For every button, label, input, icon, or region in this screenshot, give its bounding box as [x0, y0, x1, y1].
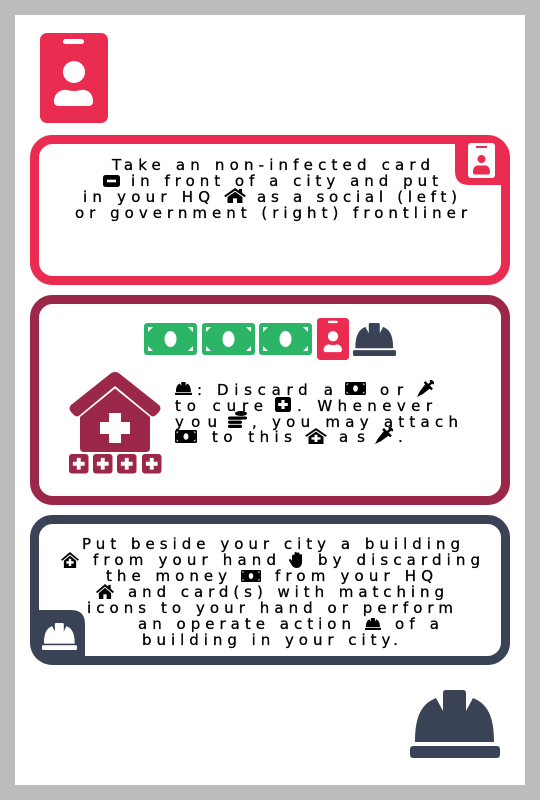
text: hospital rule — [175, 380, 458, 446]
text: hospital rule: as — [339, 428, 365, 446]
text: build rule: icons to your hand or perform — [87, 599, 453, 617]
icon: hospital — [69, 372, 162, 474]
text: hospital rule: to cure — [175, 397, 263, 415]
text: frontliner rule: in front of a city and put — [131, 172, 438, 190]
text: hospital rule: you — [175, 413, 217, 431]
text: build rule: from your hand — [93, 551, 276, 569]
text: build rule: an operate action — [138, 615, 351, 633]
text: hospital rule: Discard a — [217, 381, 333, 399]
corner tab with id icon — [455, 137, 508, 185]
panel: build action — [32, 520, 506, 663]
text: build rule: of a — [395, 615, 439, 633]
text: build rule: by discarding — [318, 551, 480, 569]
icon: frontliner id badge — [40, 33, 108, 123]
text: build rule: from your HQ — [275, 567, 433, 585]
text: build rule — [61, 535, 480, 649]
text: hospital rule: . Whenever — [297, 397, 433, 415]
text: frontliner rule: or government (right) frontliner — [75, 204, 468, 222]
text: frontliner rule: in your HQ — [83, 188, 210, 206]
text: build rule: Put beside your city a building — [82, 535, 460, 553]
panel: frontliner action — [34, 137, 508, 280]
text: hospital rule: , you may attach — [252, 413, 458, 431]
text: frontliner rule — [75, 156, 468, 222]
icon: large helmet — [410, 690, 500, 758]
text: build rule: and card(s) with matching — [128, 583, 444, 601]
cost: three money cards, id card, helmet — [144, 318, 396, 360]
corner tab with helmet icon — [32, 610, 85, 663]
text: hospital rule: : — [197, 381, 202, 399]
text: hospital rule: to this — [212, 428, 292, 446]
text: hospital rule: or — [380, 381, 404, 399]
text: frontliner rule: as a social (left) — [257, 188, 457, 206]
text: frontliner rule: Take an non-infected card — [111, 156, 430, 174]
icon: house — [224, 188, 246, 203]
text: build rule: the money — [106, 567, 227, 585]
text: hospital rule: . — [398, 428, 403, 446]
panel: hospital building — [34, 300, 506, 500]
text: build rule: building in your city. — [142, 631, 398, 649]
icon: minus card — [103, 175, 120, 187]
